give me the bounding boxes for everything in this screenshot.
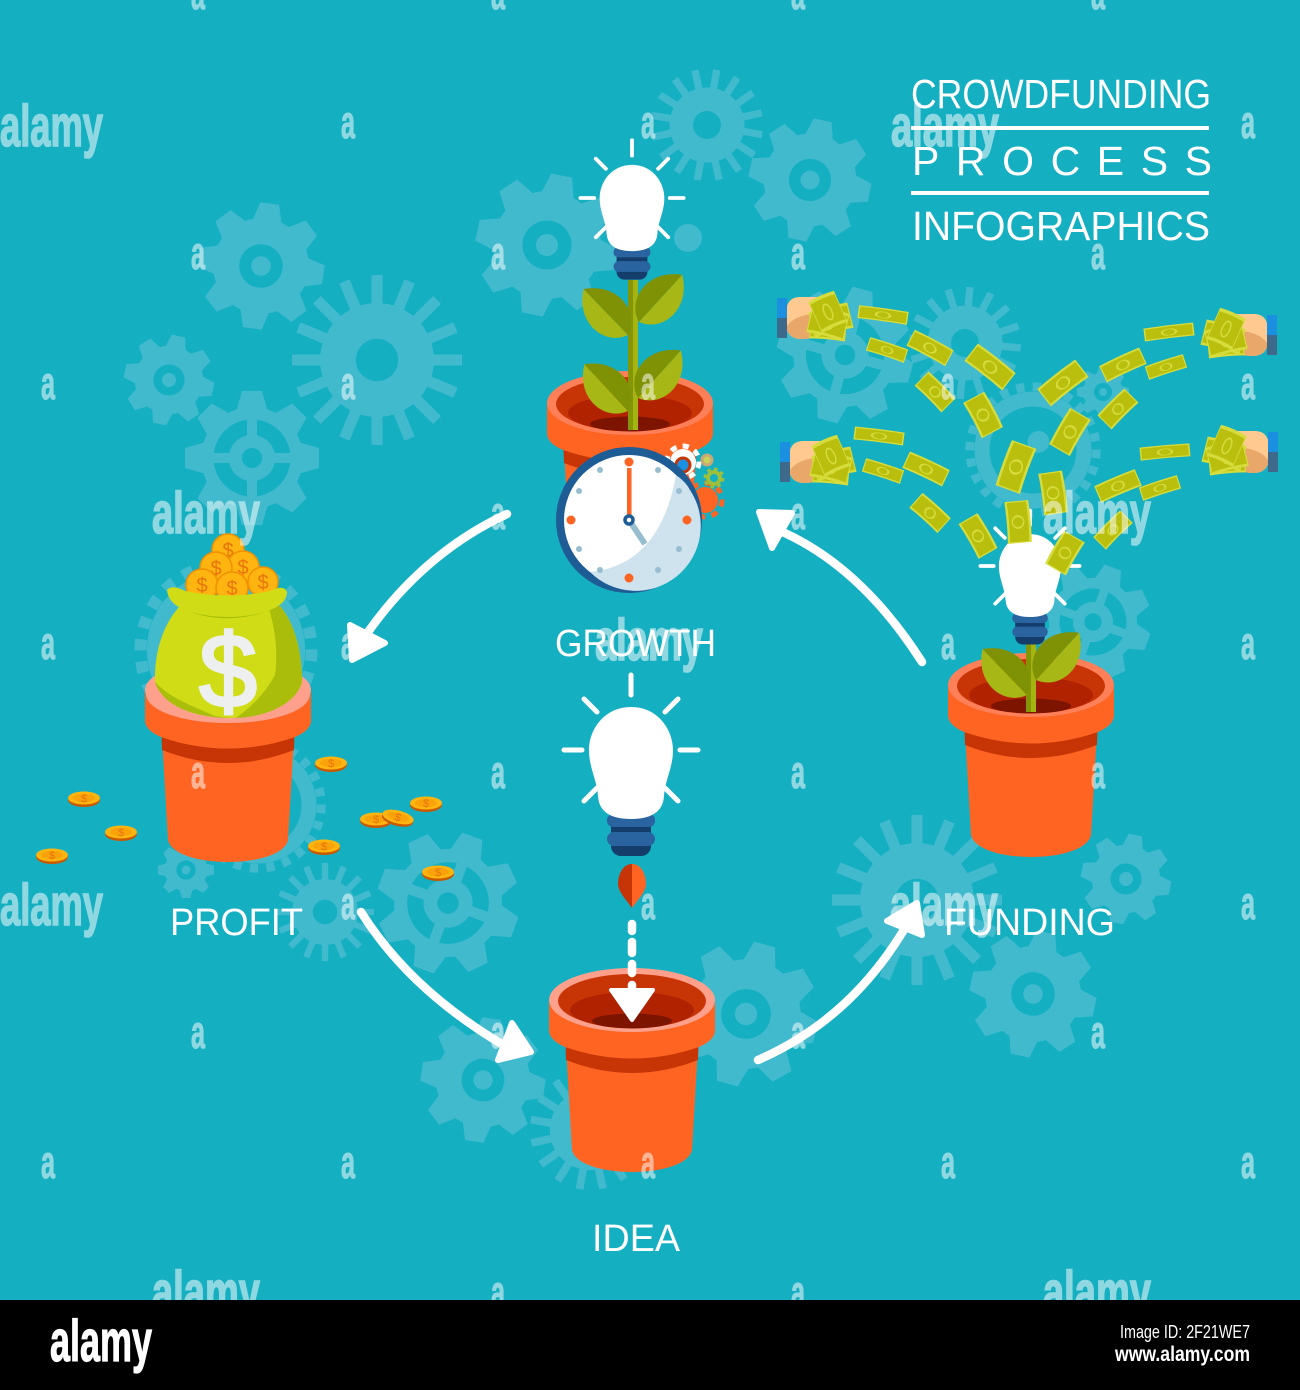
watermark: alamy pattern: a (641, 877, 655, 929)
watermark: alamy pattern: a (791, 746, 805, 798)
scattered coins: $ (423, 798, 429, 810)
icon: gold coins pile: $ (237, 557, 249, 579)
scattered coins: $ (373, 814, 379, 826)
title: crowdfunding process infographics: PROCESS (912, 138, 1212, 184)
watermark: alamy pattern: a (791, 487, 805, 539)
icon: gold coins pile: $ (222, 540, 234, 562)
icon: gold coins pile: $ (210, 558, 222, 580)
watermark: alamy pattern: a (41, 1136, 55, 1188)
watermark: alamy pattern: a (1241, 617, 1255, 669)
watermark: alamy pattern: a (1241, 1136, 1255, 1188)
watermark: alamy pattern: a (491, 227, 505, 279)
watermark: alamy pattern: a (491, 746, 505, 798)
funding pot (948, 653, 1114, 857)
growth plant (569, 261, 697, 430)
profit pot (145, 660, 311, 862)
icon: gold coins pile: $ (257, 572, 269, 594)
watermark: alamy pattern: a (491, 487, 505, 539)
title: crowdfunding process infographics: CROWDFUNDING (911, 71, 1211, 117)
watermark: alamy pattern: a (191, 227, 205, 279)
pot rim front (145, 690, 311, 748)
icon: idea light bulb (564, 675, 698, 856)
watermark: alamy pattern: a (791, 227, 805, 279)
watermark: alamy pattern: a (1091, 1006, 1105, 1058)
icon: clock (560, 451, 701, 591)
image id: Image ID: 2F21WE7 (1120, 1322, 1250, 1342)
watermark: alamy pattern: alamy (152, 1260, 260, 1325)
watermark: alamy pattern: a (341, 1136, 355, 1188)
watermark: alamy pattern: a (1241, 96, 1255, 148)
icon: gold coins pile: $ (196, 575, 208, 597)
title: crowdfunding process infographics (911, 71, 1212, 249)
scattered coins: $ (435, 867, 441, 879)
icon: funding light bulb (980, 510, 1080, 644)
scattered coins: $ (393, 811, 402, 825)
scattered coins: $ (118, 827, 124, 839)
arrow: idea to funding (758, 903, 922, 1060)
scattered coins: $ (321, 841, 327, 853)
label: growth: GROWTH (555, 623, 716, 665)
watermark: alamy pattern: a (341, 617, 355, 669)
scattered coins: $ (328, 758, 334, 770)
label: profit: PROFIT (170, 902, 303, 944)
watermark: alamy pattern: a (1091, 746, 1105, 798)
watermark: alamy pattern: a (791, 1266, 805, 1318)
icon: gold coins pile: $ (226, 578, 238, 600)
watermark: alamy pattern: a (641, 96, 655, 148)
panel: funding stage (777, 290, 1278, 944)
icon: gold coins pile (186, 534, 278, 604)
website: www.alamy.com (1114, 1343, 1250, 1366)
background gears (116, 60, 1179, 1200)
watermark: alamy pattern: a (341, 357, 355, 409)
dashed arrow: seed falling into pot (611, 924, 653, 1020)
watermark: alamy pattern: a (641, 1136, 655, 1188)
arrow: growth to profit (350, 514, 507, 660)
watermark: alamy pattern: a (1091, 227, 1105, 279)
watermark: alamy pattern: a (491, 1266, 505, 1318)
watermark: alamy pattern: a (191, 1006, 205, 1058)
watermark: alamy pattern: a (191, 746, 205, 798)
watermark: alamy pattern: a (41, 357, 55, 409)
watermark: alamy pattern: alamy (1043, 481, 1151, 546)
icon: growth light bulb (580, 140, 684, 280)
icon: money bag: $ (199, 614, 257, 730)
watermark: alamy pattern: a (1241, 877, 1255, 929)
arrow: funding to growth (759, 512, 922, 662)
watermark: alamy pattern: alamy (890, 873, 998, 938)
watermark: alamy pattern: a (41, 617, 55, 669)
icon: money bag (155, 587, 302, 730)
panel: idea stage (549, 675, 715, 1260)
watermark: alamy pattern: a (941, 617, 955, 669)
flying bank notes (853, 305, 1195, 575)
watermark: alamy pattern: a (641, 357, 655, 409)
watermark: alamy pattern: alamy (1043, 1260, 1151, 1325)
watermark: alamy pattern: alamy (0, 94, 103, 159)
funding plant (968, 619, 1094, 712)
watermark: alamy pattern: a (1241, 357, 1255, 409)
footer bar (0, 1300, 1300, 1390)
scattered coins (36, 756, 454, 881)
watermark: alamy pattern: a (791, 1006, 805, 1058)
watermark: alamy pattern: alamy (152, 481, 260, 546)
panel: profit stage (36, 534, 454, 944)
watermark: alamy pattern: a (941, 357, 955, 409)
watermark: alamy pattern: a (491, 1006, 505, 1058)
icon: hand bottom right (1201, 424, 1278, 476)
growth pot (547, 371, 713, 485)
watermark: alamy pattern: alamy (0, 873, 103, 938)
watermark: alamy pattern: a (941, 1136, 955, 1188)
scattered coins: $ (81, 793, 87, 805)
watermark: alamy pattern: alamy (595, 608, 703, 673)
watermark: alamy pattern: a (341, 877, 355, 929)
label: idea: IDEA (592, 1218, 681, 1260)
icon: seed (618, 864, 646, 908)
alamy logo: alamy (50, 1309, 152, 1374)
title: crowdfunding process infographics: INFOGRAPHICS (912, 203, 1210, 249)
watermark: alamy pattern: alamy (891, 94, 999, 159)
label: funding: FUNDING (944, 902, 1115, 944)
idea pot (549, 968, 715, 1172)
icon: small gears (667, 446, 723, 517)
arrow: profit to idea (361, 912, 531, 1060)
icon: hand top right (1200, 307, 1277, 359)
icon: hand top left (777, 290, 854, 342)
panel: growth stage (547, 140, 723, 665)
scattered coins: $ (49, 850, 55, 862)
icon: hand bottom left (780, 434, 857, 486)
watermark: alamy pattern: a (341, 96, 355, 148)
